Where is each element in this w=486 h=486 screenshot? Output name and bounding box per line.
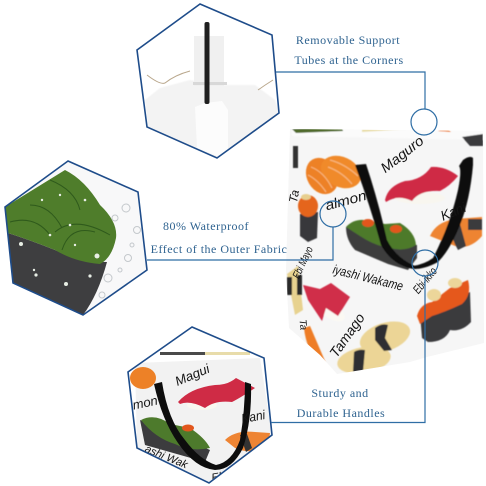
- text: Hiyashi Wakame: iyashi Wakame: [331, 262, 405, 294]
- hexagon: durable handles: Magui: [173, 360, 213, 389]
- label: removable support tubes: Tubes at the Corners: [294, 53, 404, 67]
- label: waterproof: [151, 219, 287, 256]
- text: Ebi-ikko: Ebi-ikko: [410, 264, 440, 296]
- handle: left: [355, 164, 415, 269]
- text: Ta lower: Ta: [297, 319, 308, 331]
- text: Ebi Mayo: Ebi Mayo: [291, 245, 316, 281]
- label: removable support tubes: Removable Support: [296, 33, 400, 47]
- left-edge details: [287, 146, 303, 315]
- bag print lettering: [286, 132, 469, 360]
- sushi: salmon: [305, 154, 362, 195]
- callout line: handles: [271, 250, 438, 422]
- callout line: waterproof: [147, 201, 346, 260]
- bag top rim: [292, 129, 483, 147]
- label: waterproof: 80% Waterproof: [163, 219, 249, 233]
- sushi: lower tuna: [303, 283, 350, 325]
- label: waterproof: Effect of the Outer Fabric: [151, 242, 287, 256]
- bag body: [286, 129, 484, 374]
- callout line: support tubes: [276, 72, 437, 135]
- text: Ta: Ta: [286, 188, 302, 204]
- sushi: left gunkan: [298, 194, 318, 242]
- hexagon: durable handles: ashi Wak: [143, 443, 190, 471]
- product: sushi print storage bag: [286, 125, 484, 377]
- hexagon: durable handles: Ebi: [211, 470, 229, 484]
- hexagon: waterproof fabric: [0, 155, 150, 320]
- text: Tamago: Tamago: [326, 310, 368, 360]
- label: handles: Durable Handles: [297, 406, 385, 420]
- hexagon: durable handles: mon: [131, 393, 159, 413]
- text: Maguro: Maguro: [377, 132, 427, 176]
- hexagon: durable handles: Kani: [240, 407, 267, 426]
- handle: right: [413, 157, 473, 269]
- text: Salmon: almon: [323, 187, 368, 213]
- sushi: maguro tuna: [385, 167, 458, 204]
- sushi: kani crab: [430, 217, 482, 250]
- hexagon: support tube: [130, 0, 285, 160]
- label: handles: Sturdy and: [311, 386, 369, 400]
- text: Kani: Kani: [438, 199, 469, 224]
- bag artwork: [287, 125, 484, 377]
- label: removable support tubes: [294, 33, 404, 67]
- sushi: ikura gunkan: [417, 278, 471, 342]
- sushi: tamago: [336, 321, 411, 372]
- sushi: wakame gunkan: [346, 219, 417, 270]
- sushi: lower salmon: [303, 325, 326, 362]
- hexagon: durable handles: [127, 326, 273, 484]
- label: handles: [297, 386, 385, 420]
